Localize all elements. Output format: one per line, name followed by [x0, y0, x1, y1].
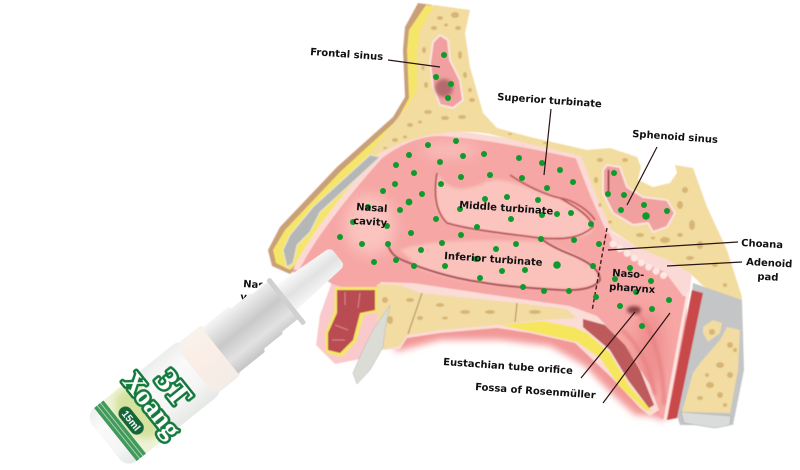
label: Nasal cavity: Nasal [356, 202, 388, 215]
bottle collar [175, 322, 245, 396]
pale mucosal edge [296, 133, 610, 270]
green medication dots [337, 52, 672, 329]
label: Adenoid pad: pad [757, 272, 779, 284]
pink mucosa of nasal cavity and pharynx [292, 133, 688, 420]
label: Fossa of Rosenmuller: Fossa of Rosenmüller [475, 382, 596, 401]
palate suture lines [408, 293, 517, 334]
pharynx folds [622, 312, 664, 405]
grey shroud [202, 278, 301, 373]
palatal muscle [583, 319, 654, 408]
red muscle in upper lip [328, 290, 375, 353]
bottle body [85, 337, 225, 469]
green label band [94, 400, 146, 461]
flange [266, 277, 306, 326]
light glow in cavity [345, 144, 664, 390]
adenoid scallops [613, 244, 668, 278]
middle turbinate fill [435, 173, 593, 238]
red pharyngeal muscle [667, 290, 703, 420]
pale border of nasal floor and palate [378, 282, 659, 416]
sphenoid sinus [603, 165, 675, 232]
frontal sinus [430, 35, 463, 108]
yellow rim of lip muscle [325, 287, 378, 357]
label: Frontal sinus: Frontal sinus [310, 47, 384, 63]
frontal sinus shadow [435, 79, 453, 97]
tooth [353, 305, 390, 384]
adenoid pad [607, 229, 692, 297]
volume badge [116, 404, 147, 437]
upper vertebra bone [703, 320, 722, 342]
skin strip of forehead and nose [268, 3, 432, 274]
inferior turbinate fill [400, 240, 598, 289]
oral cavity mucosa fading out [395, 315, 672, 420]
label: Eustachian tube orifice: Eustachian tube orifice [443, 357, 573, 377]
label: Nasal cavity: cavity [353, 216, 388, 229]
leader lines [388, 60, 742, 403]
cancellous bone spots [382, 12, 737, 407]
gray retropharyngeal tissue [675, 283, 744, 425]
hard palate bone [377, 284, 576, 350]
label: Superior turbinate: Superior turbinate [497, 92, 602, 110]
label: Nasal vestibule, partly hidden: vestibule [240, 292, 293, 306]
middle turbinate shadow line [435, 173, 593, 239]
yellow fat below palate [500, 321, 652, 411]
Eustachian tube opening [627, 306, 641, 314]
label: Adenoid pad: Adenoid [746, 257, 793, 270]
white mask around shroud [196, 274, 310, 381]
superior turbinate fold [510, 175, 595, 220]
label: Choana: Choana [741, 238, 783, 251]
brand text 3T: 3T [148, 362, 200, 413]
label: Nasal vestibule, partly hidden: Nasal [243, 279, 275, 292]
label: Sphenoid sinus: Sphenoid sinus [632, 129, 718, 146]
nozzle [276, 244, 348, 310]
bone of frontal region [368, 5, 742, 309]
lower vertebra bone [682, 327, 740, 413]
nasal spray bottle [83, 227, 362, 470]
gray nasal cartilage [283, 155, 380, 267]
gum and lip [316, 282, 382, 364]
label: Nasopharynx: Naso- [612, 268, 645, 281]
muscle texture [332, 292, 360, 340]
pale wall stripe [665, 293, 688, 420]
sphenoid sinus shadow [608, 170, 609, 192]
subcutaneous fat stripe [273, 5, 438, 270]
label: Nasopharynx: pharynx [609, 282, 656, 296]
dashed choana boundary [592, 228, 607, 311]
label highlight [106, 381, 169, 447]
anatomy diagram: sagittal section of the nasal cavity [268, 3, 744, 428]
label background [94, 377, 176, 461]
inferior turbinate shadow line [387, 240, 600, 290]
brand text Xoang: Xoang [117, 366, 188, 444]
volume badge: 15ml [119, 409, 142, 434]
disc at base [681, 412, 731, 428]
label: Inferior turbinate: Inferior turbinate [444, 251, 543, 269]
label: Middle turbinate: Middle turbinate [459, 200, 554, 218]
